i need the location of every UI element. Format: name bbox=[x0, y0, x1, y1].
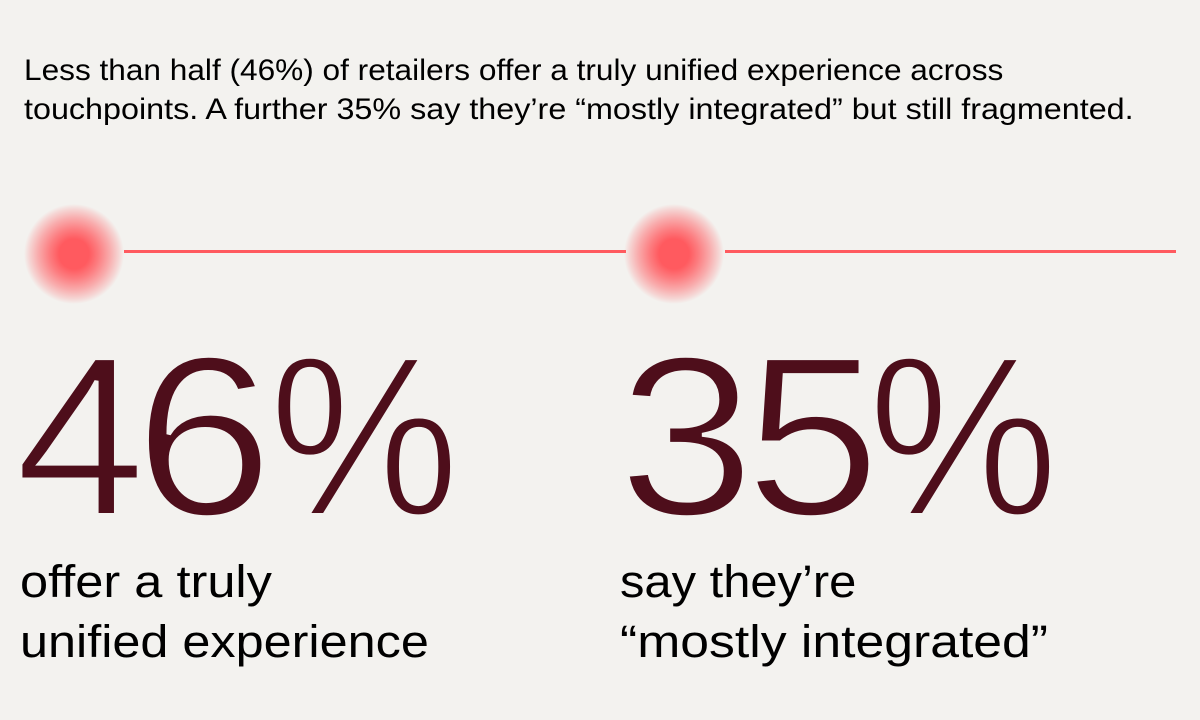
stat label: 35% bbox=[620, 556, 1048, 667]
stat: 35%: 5 bbox=[745, 310, 881, 564]
connector line one bbox=[124, 250, 626, 253]
intro text: Less than half (46%) of retailers offer a truly unified experience across bbox=[24, 54, 1003, 87]
stat label: 46%: offer a truly bbox=[20, 556, 272, 607]
connector line two bbox=[725, 250, 1176, 253]
stat: 35%: % bbox=[868, 310, 1059, 564]
icon: glowing dot one bbox=[24, 204, 124, 304]
stat: 35% bbox=[618, 310, 1059, 564]
stat label: 35%: say they’re bbox=[620, 556, 856, 607]
icon: glowing dot two bbox=[624, 204, 724, 304]
stat: 46%: 4 bbox=[15, 310, 146, 564]
stat: 46%: 6 bbox=[134, 310, 273, 564]
stat: 46%: % bbox=[269, 310, 460, 564]
stat label: 46%: unified experience bbox=[20, 616, 429, 667]
stat label: 46% bbox=[20, 556, 429, 667]
stat: 46% bbox=[15, 310, 460, 564]
intro text: touchpoints. A further 35% say they’re “mostly integrated” but still fragmented. bbox=[24, 92, 1134, 126]
stat: 35%: 3 bbox=[618, 310, 755, 564]
intro text bbox=[24, 54, 1134, 126]
stat label: 35%: “mostly integrated” bbox=[620, 616, 1048, 667]
